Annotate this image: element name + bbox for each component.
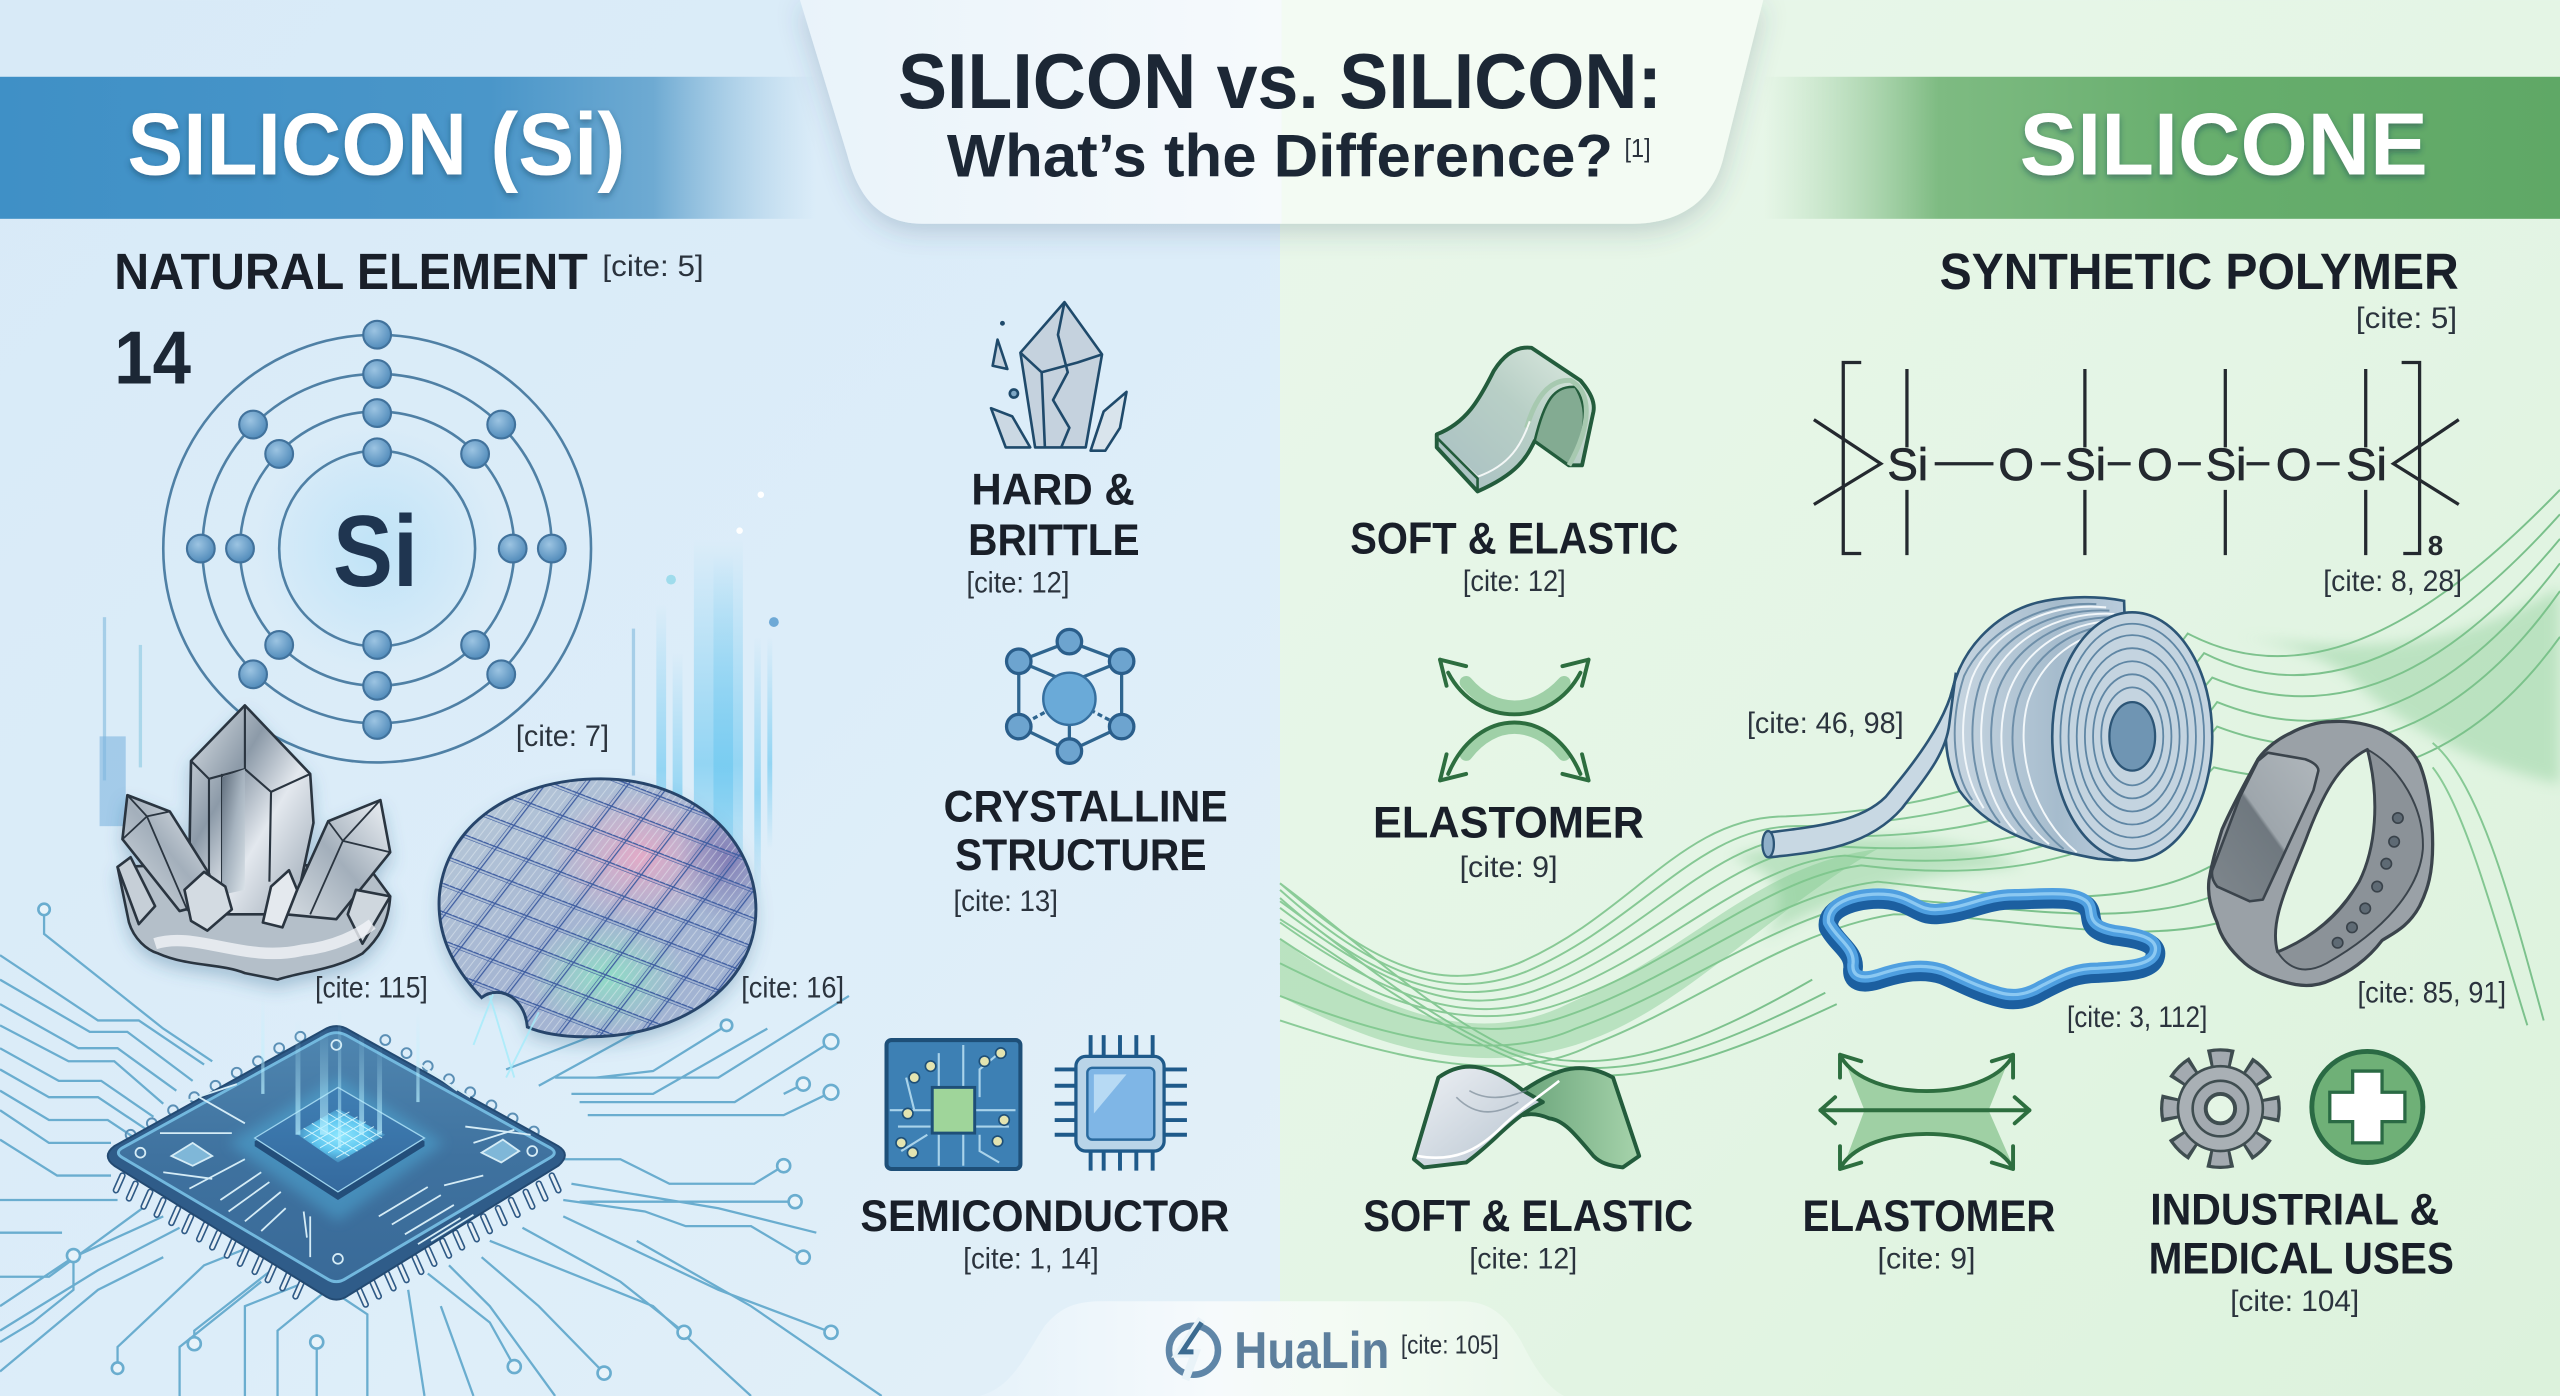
diagram: silicon atom [163, 321, 591, 762]
diagram: siloxane chain: Si [2065, 439, 2106, 490]
diagram: siloxane chain: Si [1887, 439, 1928, 490]
heading: silicon: SILICON (Si) [127, 95, 625, 194]
diagram: siloxane chain: Si [2206, 439, 2246, 490]
circuit traces [0, 911, 882, 1396]
title panel [800, 0, 1763, 224]
text: industrial and medical uses: [cite: 104] [2230, 1285, 2359, 1318]
icon: stretch arrows [1820, 1055, 2029, 1169]
decorative wave fill right [2220, 588, 2560, 784]
text: elastomer [1373, 799, 1644, 884]
diagram: siloxane chain [1814, 362, 2459, 561]
text: soft and elastic lower [1363, 1192, 1693, 1276]
illustration: silicone gasket [1828, 894, 2156, 1000]
label: synthetic polymer [1940, 243, 2459, 335]
text: elastomer: [cite: 9] [1460, 851, 1558, 884]
core grid [296, 1109, 385, 1162]
band: silicon header [0, 77, 816, 219]
decorative wave fill [1280, 849, 1878, 1058]
text: elastomer: ELASTOMER [1373, 799, 1644, 848]
text: semiconductor: [cite: 1, 14] [963, 1243, 1099, 1276]
icon: gear [2171, 1060, 2269, 1158]
title line 2: What’s the Difference? [947, 121, 1613, 189]
label: natural element: NATURAL ELEMENT [114, 243, 588, 300]
panel: silicone background [1280, 0, 2560, 1396]
text: crystalline structure: [cite: 13] [953, 885, 1058, 918]
logo panel [980, 1301, 1564, 1396]
label: natural element: [cite: 5] [602, 250, 704, 283]
text: elastomer lower: [cite: 9] [1878, 1243, 1976, 1276]
icon: soft bent sheet [1437, 348, 1594, 491]
trace end nodes [38, 904, 838, 1380]
core glow ring [229, 1078, 444, 1221]
text: soft and elastic lower: [cite: 12] [1469, 1243, 1577, 1276]
decorative pins [116, 1176, 558, 1305]
citation: atom: [cite: 7] [516, 720, 609, 753]
illustration: glowing processor chip [108, 996, 565, 1305]
text: industrial and medical uses: MEDICAL USES [2149, 1235, 2454, 1284]
label: synthetic polymer: SYNTHETIC POLYMER [1940, 243, 2459, 300]
illustration: silicone tubing coil [1762, 597, 2212, 860]
illustration: silicon wafer [433, 767, 776, 1078]
text: hard and brittle: [cite: 12] [967, 567, 1069, 600]
text: hard and brittle [967, 466, 1140, 600]
citation: gasket: [cite: 3, 112] [2067, 1001, 2207, 1034]
decorative light bars [100, 491, 779, 914]
band: silicone header [1763, 77, 2560, 219]
atomic number: 14 [114, 316, 191, 400]
logo wordmark: HuaLin [1234, 1322, 1389, 1380]
decorative wave bundle behind silicone products [1280, 490, 2560, 1076]
text: industrial and medical uses: INDUSTRIAL & [2150, 1186, 2439, 1235]
citation: crystal: [cite: 115] [315, 972, 428, 1005]
surface traces [136, 1040, 537, 1264]
title citation: [1] [1624, 133, 1651, 163]
illustration: raw silicon crystal [118, 705, 390, 980]
text: crystalline structure: CRYSTALLINE [944, 782, 1228, 831]
diagram: siloxane chain: 8 [2428, 530, 2443, 561]
text: elastomer lower [1802, 1192, 2056, 1276]
diagram: siloxane chain: O [2137, 439, 2173, 490]
text: soft and elastic [1350, 515, 1678, 598]
text: elastomer lower: ELASTOMER [1802, 1192, 2056, 1241]
decorative pin highlights [116, 1176, 558, 1305]
diagram: siloxane chain: O [1998, 439, 2034, 490]
citation: wafer: [cite: 16] [741, 972, 844, 1005]
atom symbol: Si [333, 495, 418, 608]
text: soft and elastic: [cite: 12] [1463, 565, 1566, 598]
icon: microchip [1055, 1035, 1187, 1171]
label: synthetic polymer: [cite: 5] [2356, 302, 2457, 335]
text: industrial and medical uses [2149, 1186, 2454, 1318]
icon: circuit board [887, 1040, 1020, 1169]
icon: folded soft sheet [1414, 1067, 1639, 1167]
diagram: siloxane chain: Si [2346, 439, 2387, 490]
icon: elastomer arrows [1440, 660, 1589, 780]
icon: medical cross [2312, 1051, 2423, 1162]
diagram: siloxane chain: O [2276, 439, 2311, 490]
light beams [261, 996, 420, 1148]
text: soft and elastic lower: SOFT & ELASTIC [1363, 1192, 1693, 1241]
text: crystalline structure: STRUCTURE [955, 831, 1207, 880]
logo citation: [cite: 105] [1401, 1330, 1499, 1360]
icon: crystal lattice [1007, 629, 1134, 763]
icon: cracked crystal [991, 302, 1127, 451]
panel: silicon background [0, 0, 1280, 1396]
decorative wave fill middle [1731, 836, 2024, 939]
decorative upper pin loops [126, 1032, 539, 1140]
title line 1: SILICON vs. SILICON: [898, 37, 1662, 125]
text: semiconductor [860, 1192, 1229, 1276]
text: crystalline structure [944, 782, 1228, 918]
text: hard and brittle: HARD & [971, 466, 1135, 515]
text: soft and elastic: SOFT & ELASTIC [1350, 515, 1678, 564]
text: hard and brittle: BRITTLE [968, 516, 1140, 565]
text: semiconductor: SEMICONDUCTOR [860, 1192, 1229, 1241]
chip surface [118, 1033, 554, 1282]
logo mark [1169, 1319, 1218, 1380]
core die [255, 1091, 424, 1200]
heading: silicone: SILICONE [2020, 95, 2428, 194]
citation: tubing: [cite: 46, 98] [1747, 707, 1904, 740]
citation: polymer: [cite: 8, 28] [2323, 565, 2462, 598]
citation: wristband: [cite: 85, 91] [2358, 976, 2506, 1009]
illustration: silicone wristband [2209, 721, 2433, 985]
chip body [108, 1026, 565, 1300]
